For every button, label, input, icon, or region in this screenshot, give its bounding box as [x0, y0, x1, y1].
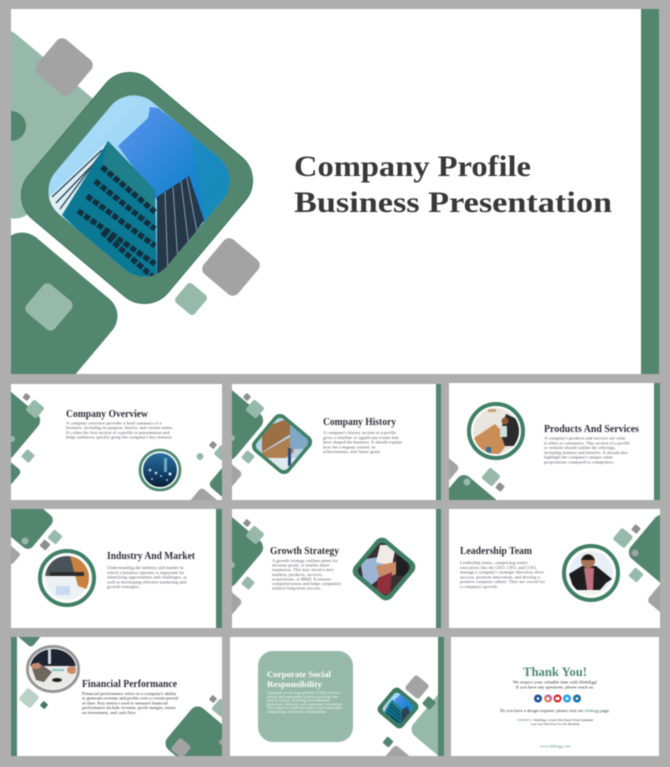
body text: how the company started, its — [323, 444, 376, 450]
grey square top — [32, 35, 96, 99]
body text: achieve long-term success. — [272, 586, 321, 591]
heading: Thank You! — [523, 664, 587, 679]
body text: A company's history section in a profile — [323, 430, 396, 435]
text panel: Corporate social responsibility (CSR) involves — [267, 691, 340, 695]
design request line: Do you have a design requests, please visit our slideegg page. — [500, 708, 610, 714]
body text: have shaped the business. It should explain — [323, 440, 403, 445]
heading: Industry And Market — [107, 551, 196, 562]
slide 6: growth strategy — [232, 508, 442, 628]
slide 9: corporate social responsibility — [230, 636, 444, 756]
body text: it offers to consumers. This section of a profile — [544, 440, 630, 445]
text panel: protection, diversity, and community investment. — [267, 702, 343, 707]
body text — [323, 430, 403, 455]
slide 5: industry and market — [10, 508, 222, 628]
body text: a company's growth. — [460, 584, 498, 589]
text panel: ethical and sustainable business practices that — [267, 695, 339, 699]
body text: helps audiences quickly grasp the company's key features. — [66, 435, 173, 440]
body text: on investment, and cash flow. — [82, 710, 137, 716]
body text: Understanding the industry and market in — [107, 565, 184, 570]
body text — [66, 420, 173, 440]
slide 2: company overview — [10, 384, 222, 500]
heading: Leadership Team — [460, 546, 533, 557]
body text: to generate revenue and profits over a certain period — [82, 696, 179, 701]
heading: Financial Performance — [82, 679, 178, 690]
credits: CREDITS: SlideEgg created this Pastel Pond template — [517, 718, 594, 722]
body text: which a business operates is important for — [107, 570, 185, 575]
text panel: Corporate Social — [267, 669, 332, 679]
credits — [517, 718, 594, 726]
body text: well as developing effective marketing and — [107, 579, 187, 584]
text panel: Responsibility — [267, 679, 323, 689]
photo: glass tower — [48, 94, 230, 278]
light inset square — [23, 281, 75, 333]
body text: manage a company's strategic direction, drive — [460, 570, 544, 576]
message: We respect your valuable time with SlideEgg! — [513, 680, 598, 684]
heading: Products And Services — [544, 424, 639, 435]
text panel — [258, 651, 353, 742]
photo: night city circle — [140, 450, 180, 490]
title: Business Presentation — [294, 186, 612, 219]
body text: increase profit, or market share — [272, 563, 329, 569]
body text: achievements, and future goals. — [323, 449, 381, 455]
body text: propositions compared to competitors. — [544, 460, 615, 464]
heading: Growth Strategy — [270, 546, 339, 557]
small light square — [173, 281, 209, 317]
large light square — [0, 20, 112, 228]
photo: building diamond — [251, 413, 313, 475]
photo: tower diamond — [375, 685, 421, 731]
body text: markets, products, services, — [272, 572, 323, 578]
body text: identifying opportunities and challenges, as — [107, 575, 187, 581]
right accent bar — [641, 9, 659, 374]
slide 1: cover — [10, 8, 660, 374]
body text: A growth strategy outlines plans for — [272, 558, 338, 563]
dark circle — [0, 111, 26, 141]
body text: growth strategies. — [107, 584, 140, 589]
heading: Company Overview — [66, 409, 149, 420]
body text: acquisitions, or R&D. It ensures — [272, 576, 331, 582]
photo: executive circle — [564, 546, 618, 600]
body text: expansion. This may involve new — [272, 567, 334, 572]
message: If you have any questions, please reach us. — [516, 684, 594, 690]
title — [294, 150, 612, 219]
body text: gives a timeline of significant events that — [323, 435, 399, 440]
body text: Leadership teams, comprising senior — [460, 560, 528, 566]
body text: competitiveness and helps companies — [272, 581, 341, 586]
text panel: This improves brand perception and stakeholder — [267, 706, 343, 710]
body text: executives like the CEO, CFO, and COO, — [460, 565, 537, 571]
photo: analyst circle — [40, 551, 94, 605]
title: Company Profile — [294, 150, 531, 183]
photo: team hands diamond — [352, 536, 416, 602]
photo: meeting circle — [469, 404, 523, 458]
slide 3: company history — [232, 384, 442, 500]
body text: Financial performance refers to a company's ability — [82, 691, 177, 696]
slide 4: products and services — [448, 382, 660, 500]
body text: A company's products and services are what — [544, 436, 626, 440]
text panel: relationships and boosts sustainability. — [267, 710, 327, 714]
body text — [107, 565, 187, 589]
slide 8: financial performance — [10, 636, 222, 756]
body text — [460, 560, 545, 589]
body text: or website should outline the offerings, — [544, 445, 616, 451]
body text: of time. Key metrics used to measure financial — [82, 700, 168, 705]
green photo frame — [9, 60, 265, 316]
body text: highlight the company's unique value — [544, 455, 613, 460]
body text — [82, 691, 179, 716]
body text: A company overview provides a brief summary of a — [66, 420, 162, 426]
slide 10: thank you — [450, 636, 660, 756]
slide 7: leadership team — [448, 508, 660, 628]
social icons — [534, 694, 581, 702]
website: www.slideegg.com — [540, 744, 571, 748]
body text: including features and benefits. It should also — [544, 450, 628, 455]
body text: It's often the first section of a profile or presentation and — [66, 430, 170, 435]
body text: performance include revenue, profit margin, return — [82, 705, 176, 711]
body text — [272, 558, 341, 591]
body text: business, including its purpose, history, and current status. — [66, 425, 173, 431]
body text: positive company culture. They are crucial for — [460, 579, 545, 584]
grey square right — [199, 235, 263, 299]
heading: Company History — [323, 417, 396, 428]
photo: finance oval — [28, 646, 78, 692]
message — [513, 680, 598, 690]
body text: success, promote innovation, and develop a — [460, 574, 540, 580]
large dark square — [0, 223, 127, 421]
credits: Can Use This Free for All Medium — [531, 722, 580, 726]
body text — [544, 436, 630, 464]
text panel: benefit society, including environmental — [267, 699, 330, 704]
